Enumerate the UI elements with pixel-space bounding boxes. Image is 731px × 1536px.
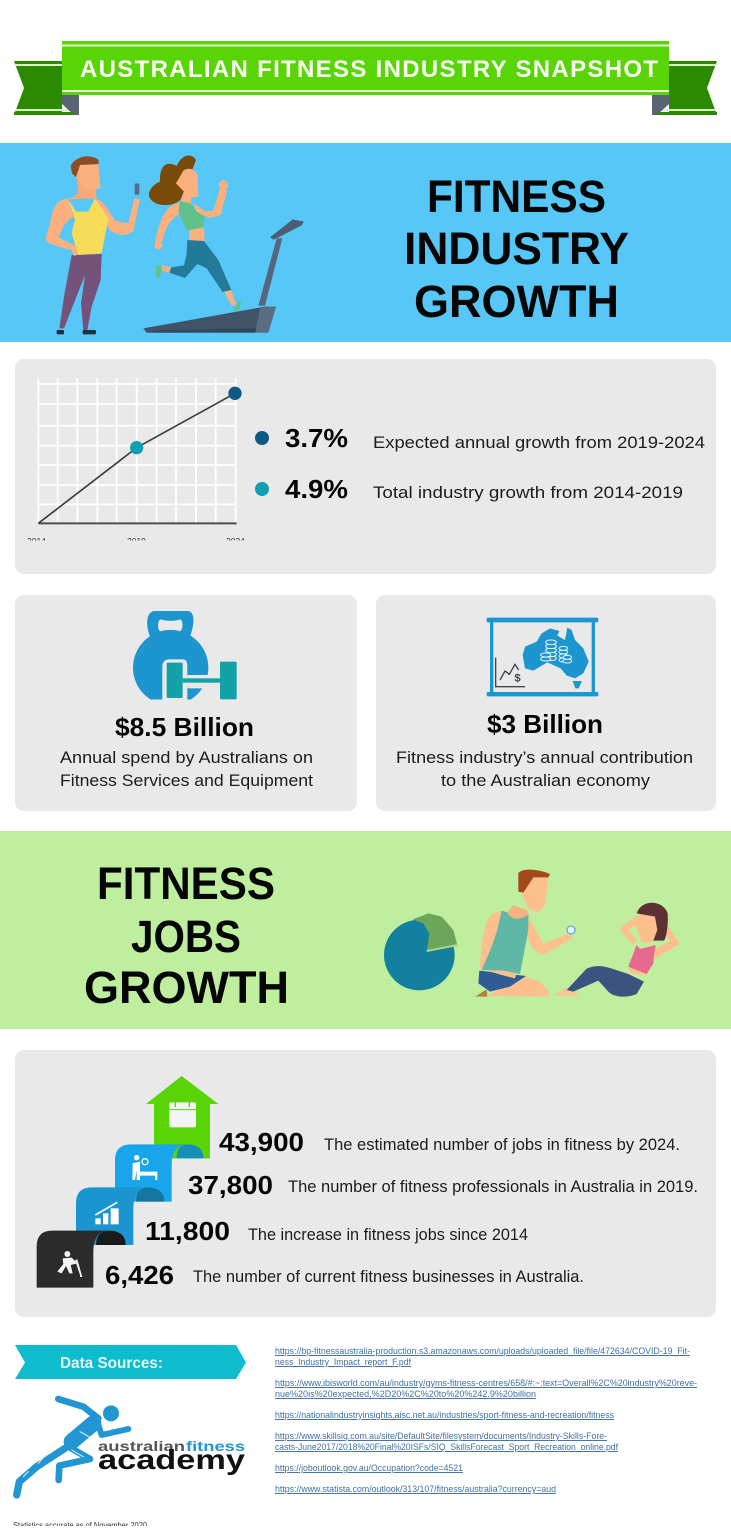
description xyxy=(396,748,693,790)
banner bar xyxy=(62,41,669,95)
stat: 4.9%: Total industry growth from 2014-2019 xyxy=(373,483,683,502)
stat: 3.7%: Expected annual growth from 2019-2024 xyxy=(373,433,705,452)
icon: Australia map board xyxy=(487,618,598,696)
stat: 37,800: 37,800 xyxy=(188,1170,273,1200)
step: house with calendar icon xyxy=(146,1076,218,1158)
heading: INDUSTRY xyxy=(404,223,629,274)
source links xyxy=(275,1346,697,1495)
stat: 11,800: 11,800 xyxy=(145,1216,230,1246)
stat: 37,800: The number of fitness professionals in Australia in 2019. xyxy=(288,1177,698,1196)
panel: annual spend xyxy=(15,595,357,811)
line chart xyxy=(38,378,242,523)
step: dark with treadmill icon xyxy=(37,1231,126,1288)
description: Fitness industry’s annual contribution xyxy=(396,748,693,767)
logo wordmark: australian xyxy=(98,1438,185,1454)
source links: ness_Industry_Impact_report_F.pdf xyxy=(275,1357,411,1368)
heading: GROWTH xyxy=(414,276,619,327)
chart year labels xyxy=(28,538,244,540)
stat heading: $3 Billion xyxy=(487,709,603,739)
stat: 43,900 xyxy=(219,1127,680,1157)
stat: 6,426 xyxy=(105,1260,584,1290)
footnote: Statistics accurate as of November 2020 xyxy=(13,1520,147,1530)
stat: 3.7% xyxy=(255,423,705,453)
description: to the Australian economy xyxy=(441,771,651,790)
right ribbon tail xyxy=(652,61,717,115)
stat: 4.9%: 4.9% xyxy=(285,474,348,504)
icon: kettlebell and dumbbell xyxy=(133,611,237,705)
source links: nue%20is%20expected,%2D20%2C%20to%20%242.9%20billion xyxy=(275,1389,536,1400)
heading: FITNESS xyxy=(427,171,606,222)
stat: 37,800 xyxy=(188,1170,698,1200)
source links: https://www.skillsiq.com.au/site/DefaultSite/filesystem/documents/Industry-Skills-Fore- xyxy=(275,1431,607,1442)
title banner xyxy=(14,41,717,115)
banner title text: AUSTRALIAN FITNESS INDUSTRY SNAPSHOT xyxy=(80,56,658,83)
woman doing sit-ups xyxy=(554,903,680,997)
source links: https://joboutlook.gov.au/Occupation?code=4521 xyxy=(275,1463,463,1474)
description xyxy=(60,748,313,790)
source links: https://www.ibisworld.com/au/industry/gyms-fitness-centres/658/#:~:text=Overall%2C%20industry%20reve- xyxy=(275,1378,697,1389)
panel: economic contribution xyxy=(376,595,716,811)
logo wordmark: fitness xyxy=(186,1438,245,1454)
stat: 43,900: 43,900 xyxy=(219,1127,304,1157)
illustration: exercise ball, trainer and woman doing sit-ups xyxy=(384,870,680,997)
runner xyxy=(149,155,241,311)
source links: https://nationalindustryinsights.aisc.net.au/industries/sport-fitness-and-recreation/fitness xyxy=(275,1410,614,1421)
source links: https://bp-fitnessaustralia-production.s3.amazonaws.com/uploads/uploaded_file/file/472634/COVID-19_Fit- xyxy=(275,1346,690,1357)
heading xyxy=(84,858,289,1013)
step: bright blue with trainer icon xyxy=(115,1144,203,1202)
source links: casts-June2017/2018%20Final%20ISFs/SIQ_SkillsForecast_Sport_Recreation_online.pdf xyxy=(275,1442,618,1453)
chart year labels: 2024 xyxy=(226,536,245,546)
stat: 6,426: 6,426 xyxy=(105,1260,174,1290)
stat: 11,800: The increase in fitness jobs since 2014 xyxy=(248,1225,528,1244)
exercise ball with towel xyxy=(384,913,458,990)
stat: 11,800 xyxy=(145,1216,528,1246)
staircase infographic xyxy=(37,1076,218,1288)
heading xyxy=(404,171,629,327)
heading: GROWTH xyxy=(84,962,289,1013)
left ribbon tail xyxy=(14,61,79,115)
band: fitness jobs growth xyxy=(0,831,731,1029)
stat: 6,426: The number of current fitness businesses in Australia. xyxy=(193,1267,584,1286)
logo: Australian Fitness Academy xyxy=(17,1399,246,1495)
treadmill xyxy=(143,219,304,333)
data sources ribbon xyxy=(15,1345,246,1379)
panel: growth chart xyxy=(15,359,716,574)
coin stacks xyxy=(541,640,572,663)
step: blue with bar chart icon xyxy=(76,1187,164,1245)
logo runner figure xyxy=(17,1399,128,1495)
logo wordmark xyxy=(98,1438,246,1475)
stat heading: $8.5 Billion xyxy=(115,712,254,742)
heading: JOBS xyxy=(131,911,241,962)
description: Fitness Services and Equipment xyxy=(60,771,313,790)
description: Annual spend by Australians on xyxy=(60,748,313,767)
source links: https://www.statista.com/outlook/313/107/fitness/australia?currency=aud xyxy=(275,1484,556,1495)
data sources ribbon: Data Sources: xyxy=(60,1355,163,1372)
trainer xyxy=(475,870,575,997)
heading: FITNESS xyxy=(97,858,275,909)
logo wordmark: academy xyxy=(98,1444,246,1475)
icon: Australia map board: $ xyxy=(514,673,521,685)
stat: 3.7%: 3.7% xyxy=(285,423,348,453)
panel: jobs statistics xyxy=(15,1050,716,1317)
stat: 4.9% xyxy=(255,474,683,504)
chart year labels: 2014 xyxy=(27,536,46,546)
chart year labels: 2019 xyxy=(127,536,146,546)
stat: 43,900: The estimated number of jobs in fitness by 2024. xyxy=(324,1135,680,1154)
trainer xyxy=(46,156,140,334)
band: fitness industry growth xyxy=(0,143,731,342)
illustration: trainer, runner and treadmill xyxy=(46,155,304,334)
